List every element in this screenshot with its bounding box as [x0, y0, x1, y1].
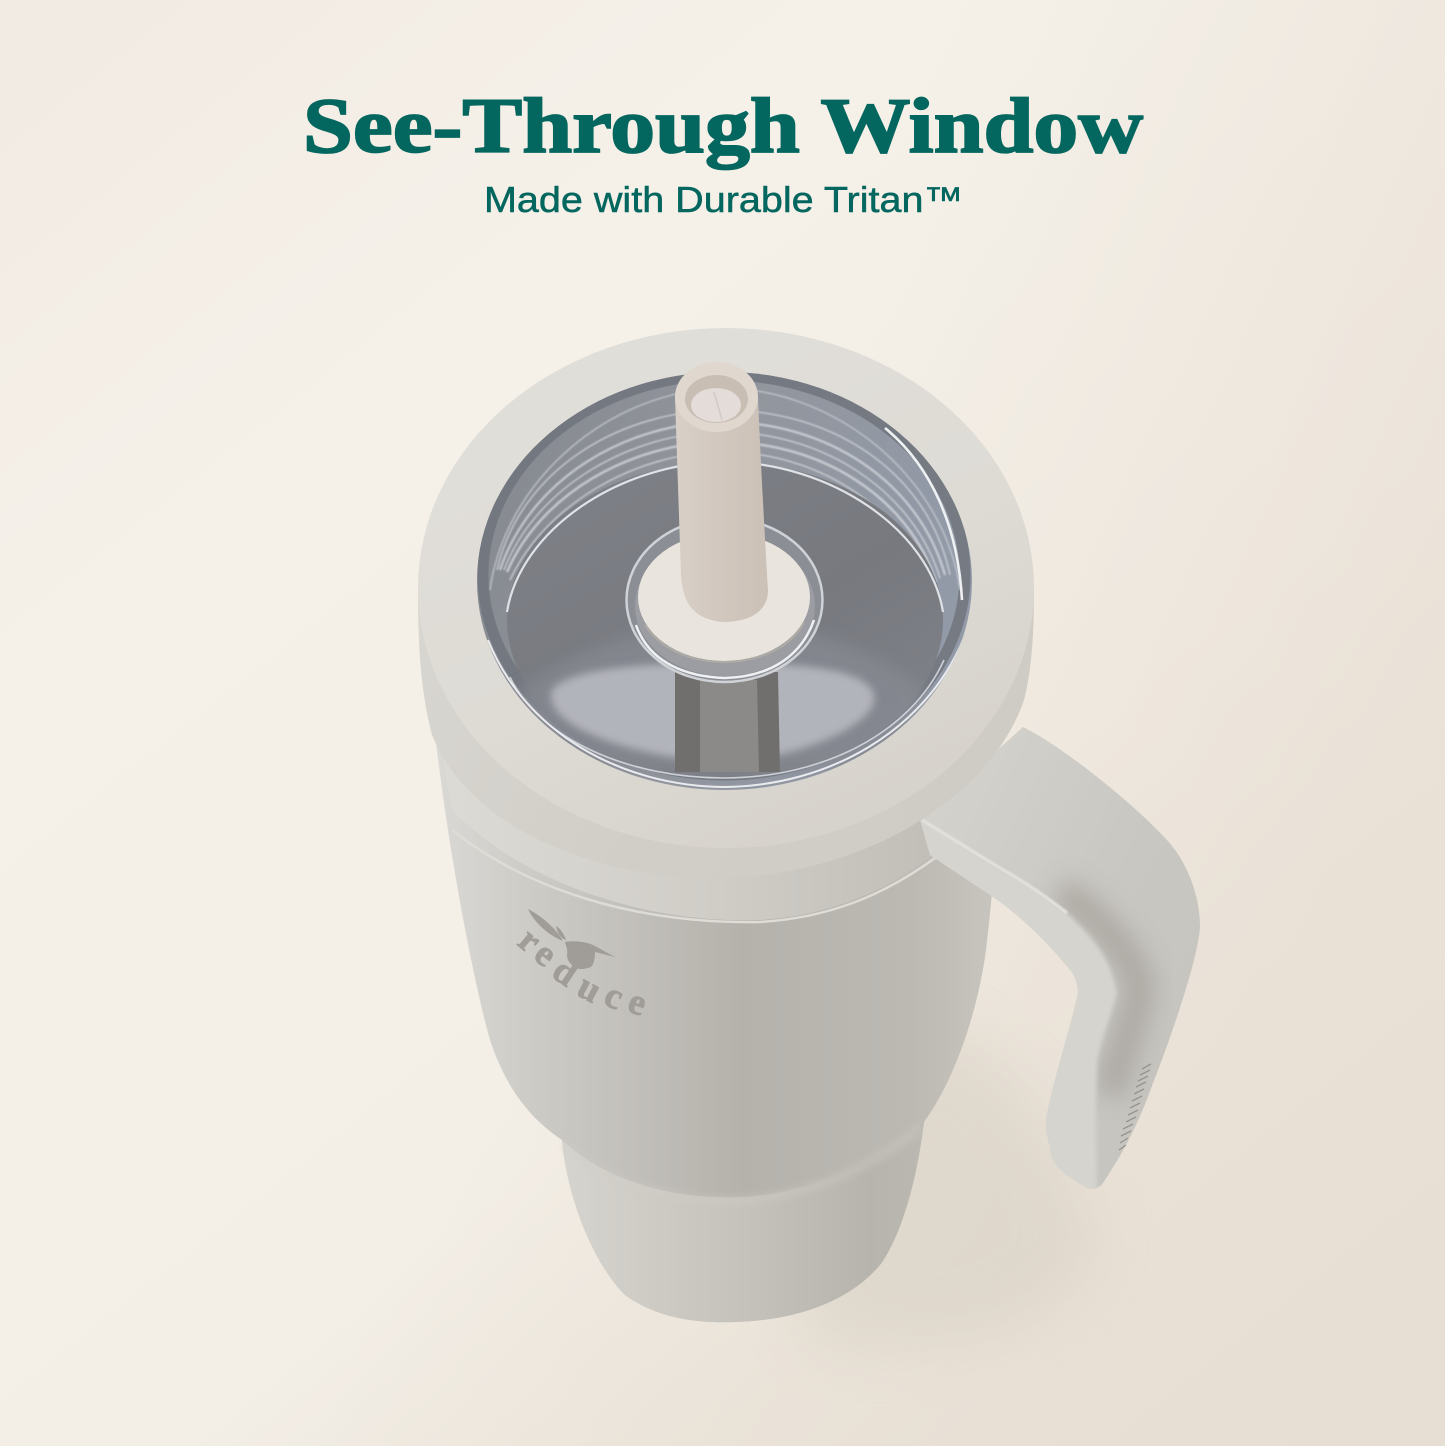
straw grommet lens [626, 518, 822, 682]
base section [562, 1122, 924, 1322]
lid side wall [418, 590, 1034, 878]
bottom reflection [551, 664, 874, 762]
infographic canvas [306, 0, 1445, 1446]
subtitle: Made with Durable Tritan™ [484, 179, 963, 220]
straw [675, 362, 768, 622]
floor shadow [800, 1020, 1100, 1347]
straw reflection [675, 672, 780, 772]
logo: reduce [510, 909, 652, 1025]
tumbler [418, 328, 1200, 1322]
glass thread highlights [490, 388, 960, 590]
handle [920, 727, 1200, 1195]
lid [418, 328, 1034, 878]
white washer [638, 533, 810, 661]
dark outer glass band [483, 375, 965, 775]
logo wordmark: reduce [510, 919, 652, 1025]
straw opening [685, 375, 748, 423]
interior floor lighter zone [520, 625, 925, 770]
lid top rim [418, 328, 1034, 848]
tumbler body [432, 700, 996, 1322]
collar band [432, 700, 996, 920]
collar lower edge [452, 830, 935, 922]
glass rim bottom lines [510, 660, 944, 778]
right edge highlight [885, 428, 962, 600]
base step highlight [564, 1126, 922, 1200]
handle outer face [920, 727, 1200, 1189]
straw top lip [675, 362, 758, 432]
handle inner face [989, 874, 1118, 1188]
interior rim highlight [507, 462, 943, 612]
handle engraved text [1119, 1064, 1151, 1150]
inner tumbler interior [507, 462, 943, 778]
handle bend shading [989, 874, 1161, 1188]
title: See-Through Window [303, 82, 1143, 169]
handle ridge highlight [922, 820, 1067, 913]
logo bird [528, 909, 615, 969]
see-through window [477, 372, 972, 790]
